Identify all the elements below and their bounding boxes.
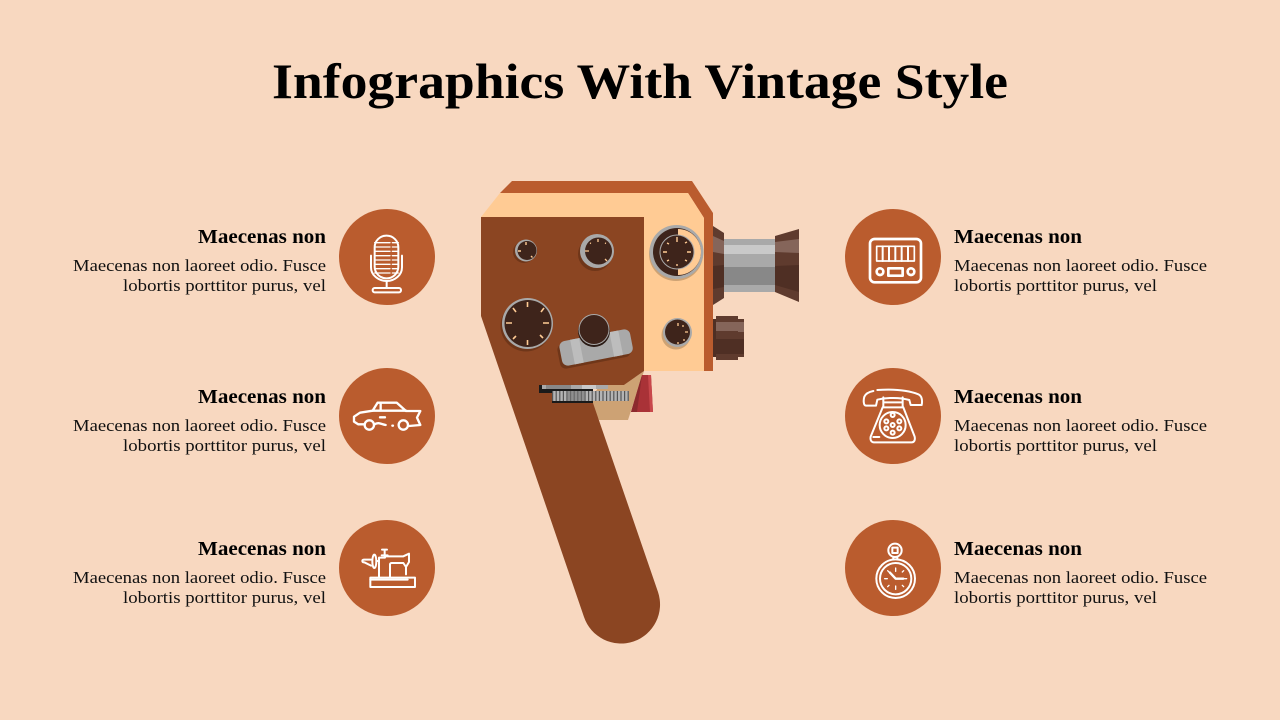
icon circle (339, 520, 435, 616)
lens collar (713, 226, 724, 305)
panel: left item 3 (73, 520, 435, 616)
icon circle (845, 520, 941, 616)
small dial one (513, 240, 537, 263)
large right dial (649, 225, 704, 281)
heading: Maecenas non (954, 227, 1082, 248)
panel: left item 2 (73, 368, 435, 464)
icon circle (339, 209, 435, 305)
text line: lobortis porttitor purus, vel (954, 436, 1157, 455)
red trigger (631, 375, 653, 412)
lens barrel (724, 239, 775, 292)
icon: car (354, 403, 420, 430)
large left dial (500, 298, 553, 352)
icon: telephone (864, 390, 922, 442)
text line: lobortis porttitor purus, vel (954, 588, 1157, 607)
camera top edge (500, 181, 713, 371)
text block: Maecenas non laoreet odio. Fusce (73, 256, 326, 275)
camera light panel (481, 193, 704, 371)
lens hood (775, 229, 799, 302)
panel: right item 2 (845, 368, 1207, 464)
camera body and handle (481, 217, 660, 644)
title: Infographics With Vintage Style (272, 53, 1008, 109)
text line: lobortis porttitor purus, vel (954, 276, 1157, 295)
text block: Maecenas non laoreet odio. Fusce (73, 568, 326, 587)
heading: Maecenas non (198, 227, 326, 248)
icon: pocket watch (876, 544, 915, 598)
tan grip (590, 371, 644, 420)
text block: Maecenas non laoreet odio. Fusce (954, 256, 1207, 275)
panel: right item 1 (845, 209, 1207, 305)
side knob (713, 316, 744, 360)
text line: lobortis porttitor purus, vel (123, 588, 326, 607)
text line: lobortis porttitor purus, vel (123, 276, 326, 295)
text block: Maecenas non laoreet odio. Fusce (954, 416, 1207, 435)
grey plate with knob (556, 314, 634, 370)
text block: Maecenas non laoreet odio. Fusce (954, 568, 1207, 587)
panel: left item 1 (73, 209, 435, 305)
icon circle (339, 368, 435, 464)
text block: Maecenas non laoreet odio. Fusce (73, 416, 326, 435)
heading: Maecenas non (198, 387, 326, 408)
text line: lobortis porttitor purus, vel (123, 436, 326, 455)
icon: sewing machine (362, 550, 415, 587)
illustration: vintage movie camera (481, 181, 799, 644)
film strip (539, 385, 629, 403)
icon: microphone (371, 236, 402, 292)
heading: Maecenas non (954, 539, 1082, 560)
heading: Maecenas non (954, 387, 1082, 408)
icon circle (845, 209, 941, 305)
icon circle (845, 368, 941, 464)
small dial two (578, 234, 614, 271)
icon: radio (870, 239, 921, 282)
small lower dial (662, 318, 692, 350)
heading: Maecenas non (198, 539, 326, 560)
panel: right item 3 (845, 520, 1207, 616)
